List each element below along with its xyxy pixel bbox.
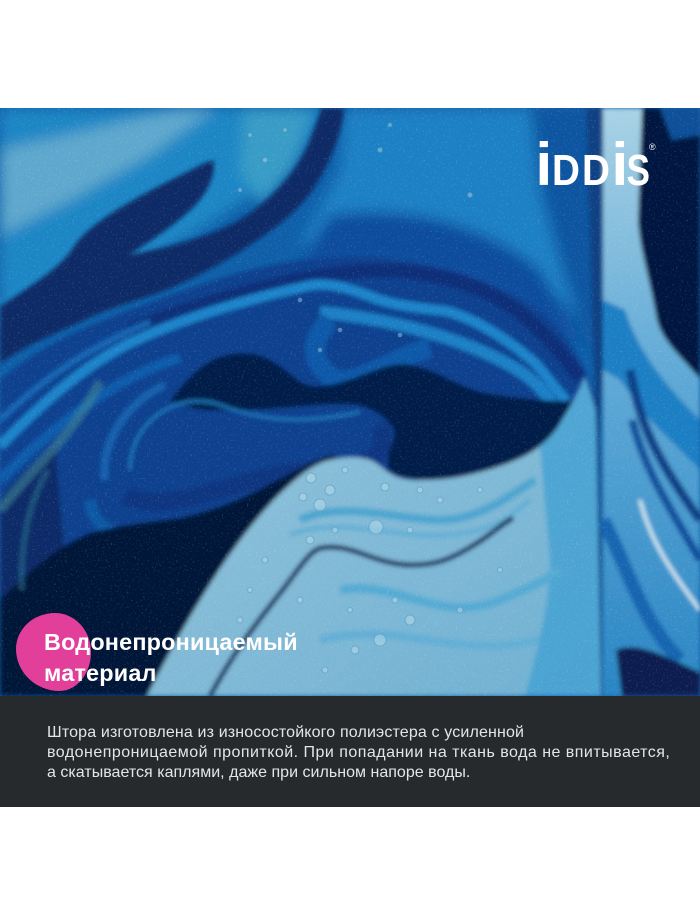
description panel <box>0 696 700 807</box>
lower-left navy band <box>0 455 390 696</box>
heading: материал <box>44 660 157 686</box>
water droplets <box>237 123 502 673</box>
description text: Штора изготовлена из износостойкого полиэстера с усиленной <box>47 724 524 741</box>
logo: iDDiS: ® <box>649 142 656 152</box>
right panel <box>603 108 700 696</box>
greenish streak <box>0 382 100 510</box>
heading <box>44 629 298 686</box>
photo: blue marbled waterproof fabric with droplets <box>0 108 700 696</box>
deep-blue swirl mass <box>0 256 600 680</box>
dark ribbon upper-left <box>0 108 344 364</box>
dark thin line across pale fabric <box>210 518 513 696</box>
navy core <box>170 353 576 481</box>
swirl rings <box>130 401 360 470</box>
left dark mass <box>0 445 65 660</box>
description text: а скатывается каплями, даже при сильном напоре воды. <box>47 764 470 781</box>
fabric speckle texture <box>0 108 700 696</box>
description text <box>47 724 670 781</box>
description text: водонепроницаемой пропиткой. При попадании на ткань вода не впитывается, <box>47 744 670 761</box>
pale fabric region <box>147 377 603 696</box>
shadow fold <box>586 108 603 696</box>
logo: iDDiS <box>536 135 656 191</box>
heading: Водонепроницаемый <box>44 629 298 655</box>
pink accent circle <box>16 613 91 691</box>
